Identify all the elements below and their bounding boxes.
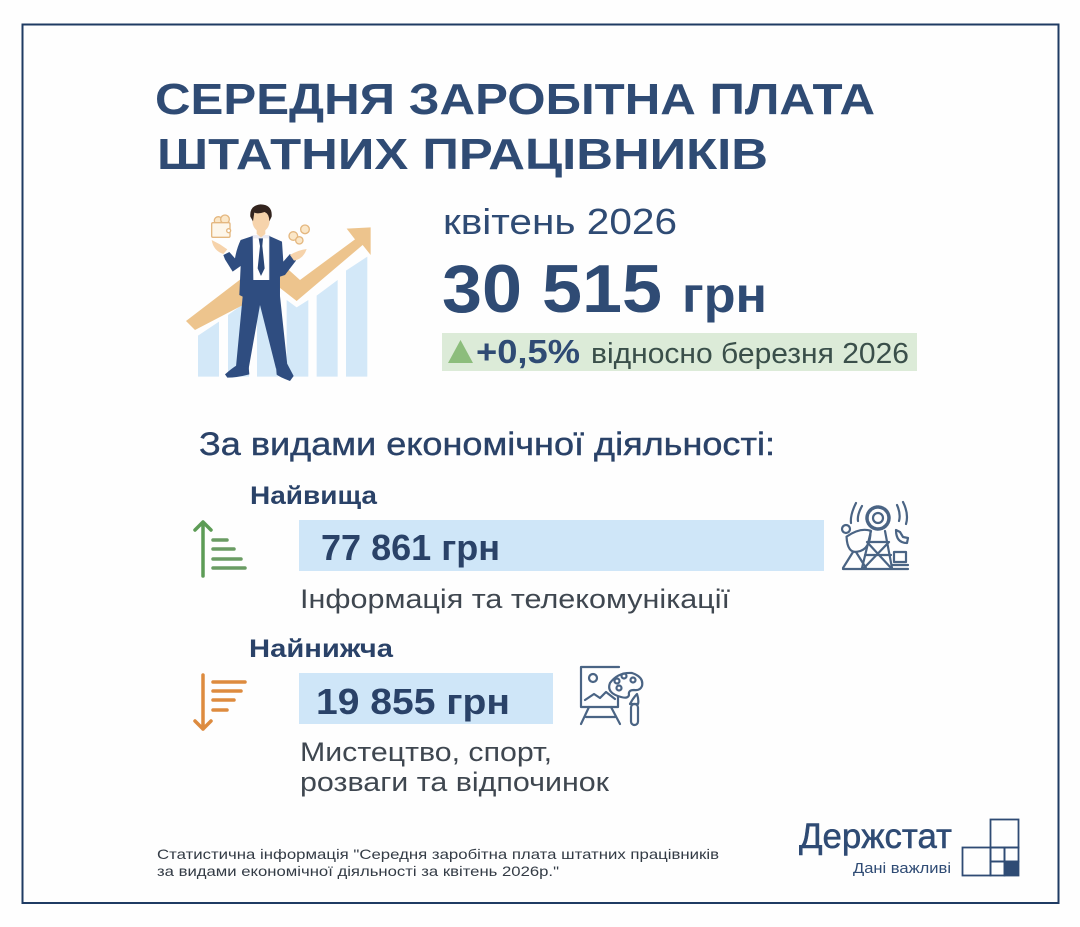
icon: telecommunications [842,502,908,569]
icon: orange down arrow [195,675,245,729]
icon: easel and palette [581,667,642,725]
lowest activity name: розваги та відпочинок [300,767,609,797]
logo mark [962,820,1018,876]
title [155,75,875,179]
highest value: 77 861 грн [321,527,500,568]
lowest block [195,635,642,797]
source note: Статистична інформація "Середня заробітна плата штатних працівників [157,846,719,862]
illustration: businessman and growth chart [186,204,371,381]
title: СЕРЕДНЯ ЗАРОБІТНА ПЛАТА [155,75,875,124]
highest bar [299,520,824,571]
source note [157,846,719,879]
headline value: 30 515 [442,251,662,327]
lowest activity name [300,737,609,797]
highest activity name: Інформація та телекомунікації [300,584,731,614]
icon: green up arrow [195,522,245,576]
businessman [212,204,307,381]
period label: квітень 2026 [443,201,677,242]
lowest label: Найнижча [249,635,394,663]
icon: up triangle [448,340,473,363]
lowest bar [299,673,553,724]
lowest value: 19 855 грн [316,681,510,722]
headline value [442,251,767,327]
icon: coins [289,225,309,244]
headline value: грн [682,267,767,323]
section heading: За видами економічної діяльності: [199,426,775,462]
logo: Держстат [799,817,1018,877]
change badge: +0,5% [476,333,580,370]
change badge [442,333,917,371]
icon: wallet [212,215,231,237]
change badge: відносно березня 2026 [591,338,909,370]
chart bars [198,257,367,377]
source note: за видами економічної діяльності за квітень 2026р." [157,863,559,879]
lowest activity name: Мистецтво, спорт, [300,737,552,767]
highest label: Найвища [250,482,378,510]
logo wordmark: Держстат [799,817,952,856]
logo tagline: Дані важливі [853,860,951,877]
growth arrow [186,227,371,330]
title: ШТАТНИХ ПРАЦІВНИКІВ [157,130,768,179]
highest block [195,482,908,614]
